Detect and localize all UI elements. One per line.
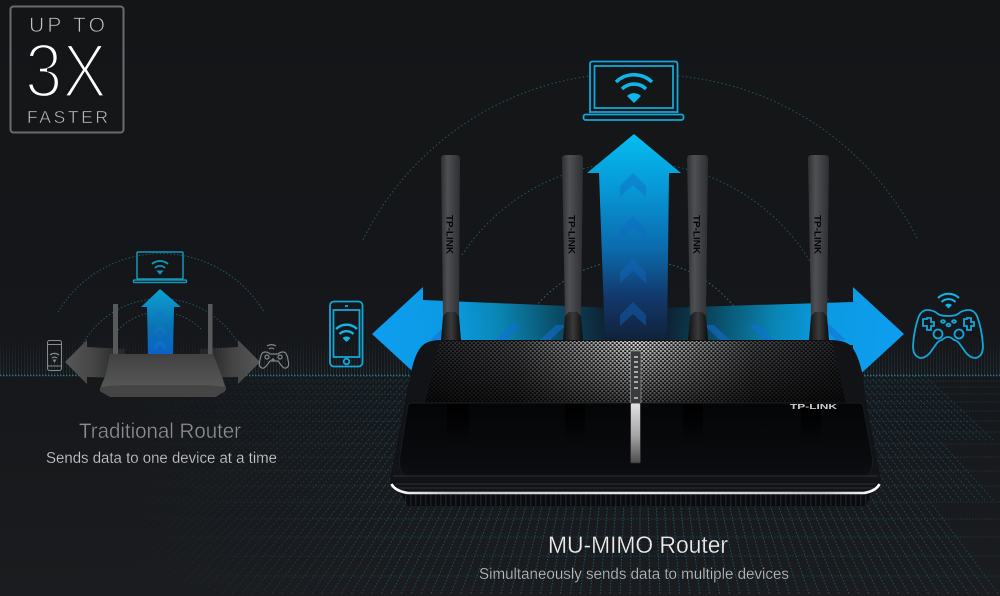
MU-MIMO antenna 3 xyxy=(687,155,708,340)
MU-MIMO subtitle: Simultaneously sends data to multiple devices xyxy=(479,566,789,583)
MU-MIMO antenna 2: TP-LINK xyxy=(566,215,576,255)
small gamepad icon xyxy=(259,345,289,368)
left blue arrow xyxy=(372,287,615,381)
traditional router left arrow xyxy=(65,340,125,384)
traditional router subtitle: Sends data to one device at a time xyxy=(46,450,277,467)
horizon line xyxy=(0,374,1000,376)
MU-MIMO antenna 3: TP-LINK xyxy=(692,215,702,255)
wifi signal on gamepad xyxy=(938,294,959,308)
traditional router body xyxy=(100,354,226,397)
back wall stripes xyxy=(0,348,1000,375)
LED panel xyxy=(630,351,641,403)
router body xyxy=(390,340,880,494)
small phone icon xyxy=(48,340,62,370)
floor grid xyxy=(134,376,1000,594)
traditional router antennas xyxy=(113,304,212,355)
MU-MIMO antenna 2 xyxy=(562,155,583,340)
base lines xyxy=(393,476,878,488)
router base xyxy=(398,488,874,506)
MU-MIMO antenna 4 xyxy=(808,155,829,340)
phone icon xyxy=(330,302,362,366)
router front panel xyxy=(400,403,872,476)
MU-MIMO antenna 1 xyxy=(441,155,461,340)
router logo: TP-LINK xyxy=(790,404,837,411)
traditional router title: Traditional Router xyxy=(79,420,241,443)
MU-MIMO antenna 4: TP-LINK xyxy=(812,215,822,255)
MU-MIMO title: MU-MIMO Router xyxy=(548,532,728,559)
gamepad icon xyxy=(913,294,983,358)
laptop icon xyxy=(584,62,684,120)
wifi signal on laptop xyxy=(616,75,652,103)
white edge strip xyxy=(392,484,880,493)
badge: up to 3X faster: UP TO xyxy=(29,14,105,37)
badge: up to 3X faster xyxy=(10,6,124,132)
front panel antenna reflections xyxy=(447,404,821,446)
badge: up to 3X faster: 3X xyxy=(25,29,107,114)
wifi signal on phone xyxy=(336,325,357,342)
MU-MIMO antenna 1: TP-LINK xyxy=(444,215,454,255)
badge: up to 3X faster: FASTER xyxy=(27,107,108,127)
up blue arrow xyxy=(587,134,681,341)
small laptop icon xyxy=(134,252,186,282)
right blue arrow xyxy=(660,287,904,381)
MU-MIMO signal arcs xyxy=(363,76,918,370)
traditional router signal arcs xyxy=(58,254,264,343)
router top grille xyxy=(425,341,846,403)
traditional router up arrow xyxy=(141,289,181,354)
silver strip xyxy=(630,403,640,463)
traditional router right arrow xyxy=(200,340,260,384)
MU-MIMO router xyxy=(390,340,880,506)
